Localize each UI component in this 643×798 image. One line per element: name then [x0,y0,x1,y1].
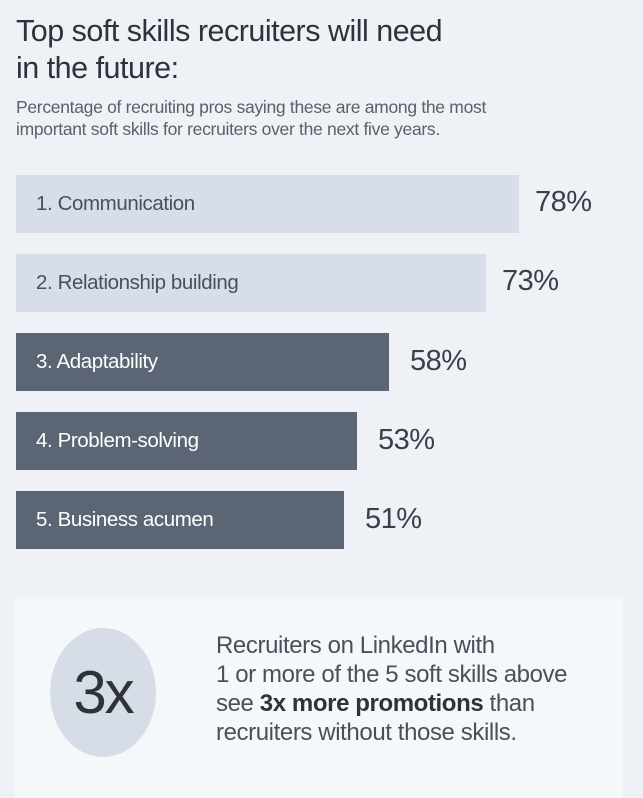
subtitle: important soft skills for recruiters over the next five years. [16,119,440,139]
subtitle: Percentage of recruiting pros saying these are among the most [16,97,486,117]
value: 53%: 53% [378,424,435,456]
value: 58%: 58% [410,345,467,377]
callout panel [15,599,623,798]
icon: 3x circle: 3x [73,659,133,726]
bar chart [16,175,592,549]
value: 51%: 51% [365,503,422,535]
bar: problem-solving: 4. Problem-solving [36,429,199,452]
callout text: 1 or more of the 5 soft skills above [216,661,567,688]
bar: adaptability: 3. Adaptability [36,350,158,373]
bar: adaptability [16,333,389,391]
callout text: Recruiters on LinkedIn with [216,632,495,659]
bar: relationship building [16,254,486,312]
title [16,14,442,85]
value: 78%: 78% [535,186,592,218]
callout text: recruiters without those skills. [216,719,517,746]
bar: communication: 1. Communication [36,192,195,215]
bar: business acumen [16,491,344,549]
bar: communication [16,175,519,233]
icon: 3x circle [50,628,156,757]
bar: relationship building: 2. Relationship building [36,271,238,294]
title: in the future: [16,51,179,85]
subtitle [16,97,486,139]
bar: business acumen: 5. Business acumen [36,508,213,531]
title: Top soft skills recruiters will need [16,14,442,48]
bar: problem-solving [16,412,357,470]
callout text: see 3x more promotions than [216,690,535,717]
value: 73%: 73% [502,265,559,297]
callout text [216,632,567,746]
